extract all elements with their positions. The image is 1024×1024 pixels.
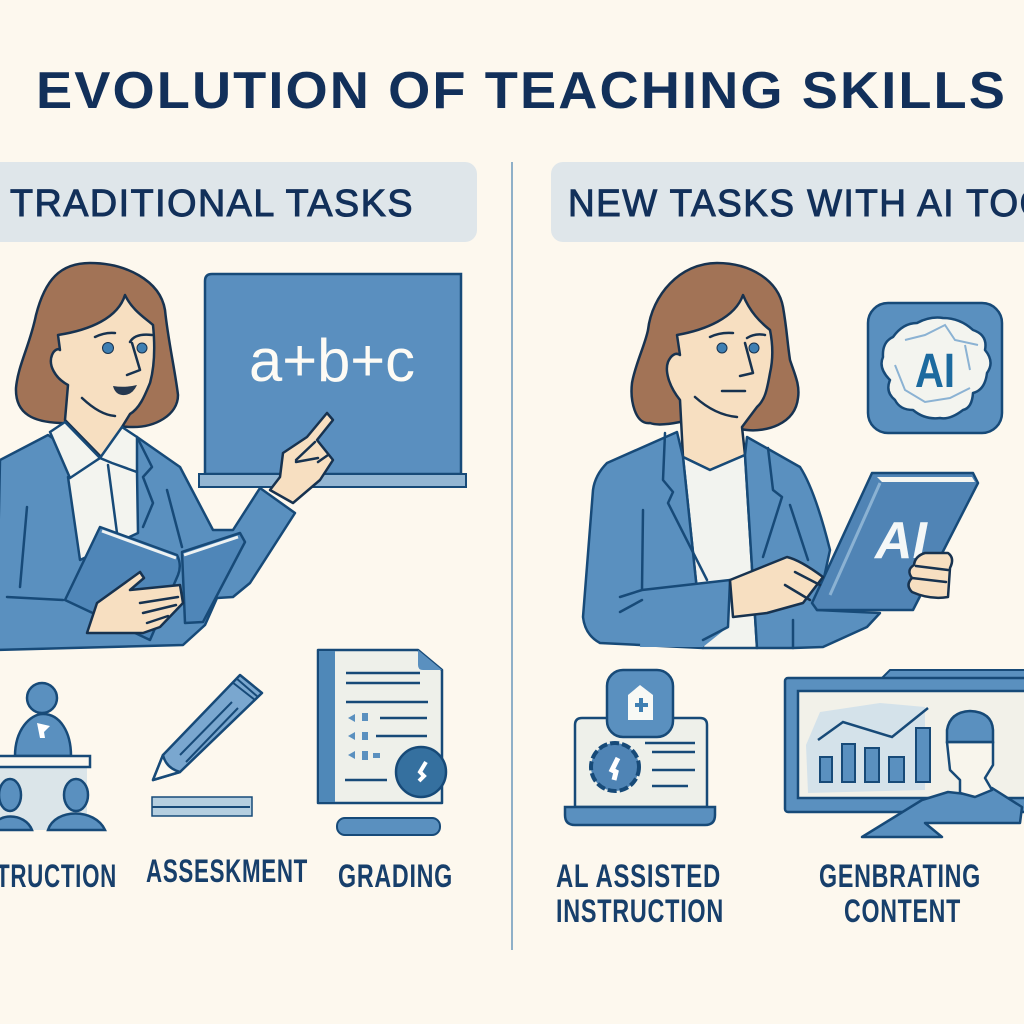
reading hand	[730, 557, 823, 617]
hand finger lines	[785, 572, 820, 600]
panel header: traditional tasks	[0, 162, 477, 242]
label: AI-assisted instruction: INSTRUCTION	[556, 893, 724, 929]
label: AI-assisted instruction: AL ASSISTED	[556, 858, 721, 894]
blouse collar	[50, 422, 137, 478]
teacher hair	[16, 263, 178, 427]
icon: assessment pencil	[152, 675, 262, 816]
center divider	[511, 162, 513, 950]
jacket	[583, 432, 880, 648]
hand finger lines	[140, 597, 178, 623]
finger lines	[296, 442, 328, 462]
icon: instruction	[0, 683, 105, 830]
icon: grading document	[318, 650, 446, 835]
pointing hand	[270, 413, 333, 503]
icon: AI-assisted instruction laptop	[565, 670, 715, 825]
tablet: AI	[873, 512, 929, 570]
icon: AI brain: AI	[915, 345, 955, 398]
teacher blouse	[68, 458, 138, 560]
tablet	[812, 473, 978, 610]
label: generating content: CONTENT	[844, 893, 961, 929]
label: AI-assisted instruction	[556, 858, 724, 929]
jacket details	[7, 437, 182, 600]
illustration: teacher at chalkboard	[0, 263, 466, 650]
holding hand	[87, 572, 183, 633]
teacher jacket	[0, 435, 295, 650]
jacket details	[620, 433, 808, 648]
tablet hand fingers	[908, 553, 952, 598]
finger lines	[912, 566, 948, 582]
panel header: traditional tasks: TRADITIONAL TASKS	[10, 183, 414, 225]
icon: generating content monitor	[785, 670, 1024, 837]
teacher neck and face	[667, 295, 772, 470]
shirt	[683, 455, 757, 648]
teacher facial features	[695, 333, 765, 417]
forearm	[640, 580, 730, 647]
teacher facial features	[82, 333, 152, 416]
icon: AI brain	[868, 303, 1002, 433]
teacher neck and face	[51, 295, 154, 463]
open book	[65, 527, 245, 640]
label: generating content	[819, 858, 981, 929]
label: assessment: ASSESKMENT	[146, 853, 308, 889]
panel header: new tasks with AI tools	[551, 162, 1024, 242]
teacher hair	[632, 263, 798, 430]
label: grading: GRADING	[338, 858, 453, 894]
illustration: teacher with AI tablet	[583, 263, 1002, 648]
chalkboard	[199, 274, 466, 487]
label: instruction: TRUCTION	[0, 858, 117, 894]
chalkboard: a+b+c	[249, 327, 415, 394]
title: EVOLUTION OF TEACHING SKILLS	[36, 62, 1007, 120]
